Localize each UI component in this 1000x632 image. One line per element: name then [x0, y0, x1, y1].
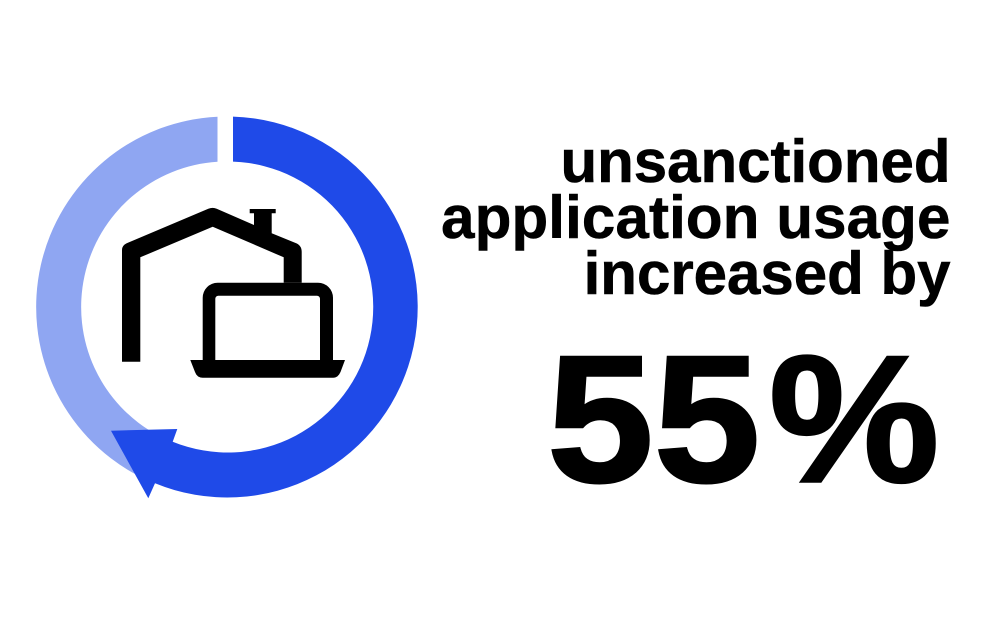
headline text: increased by	[584, 240, 951, 307]
light blue arc	[36, 117, 217, 475]
headline text: unsanctioned	[560, 128, 950, 195]
headline text	[441, 128, 951, 307]
big number 55%: 55%	[547, 317, 939, 520]
icon: laptop	[190, 283, 345, 378]
dark blue arc with arrowhead	[111, 117, 418, 498]
headline text: application usage	[441, 184, 950, 251]
icon: house with laptop	[122, 208, 345, 378]
circular arrow ring	[36, 117, 418, 498]
icon: house outline	[122, 208, 302, 362]
